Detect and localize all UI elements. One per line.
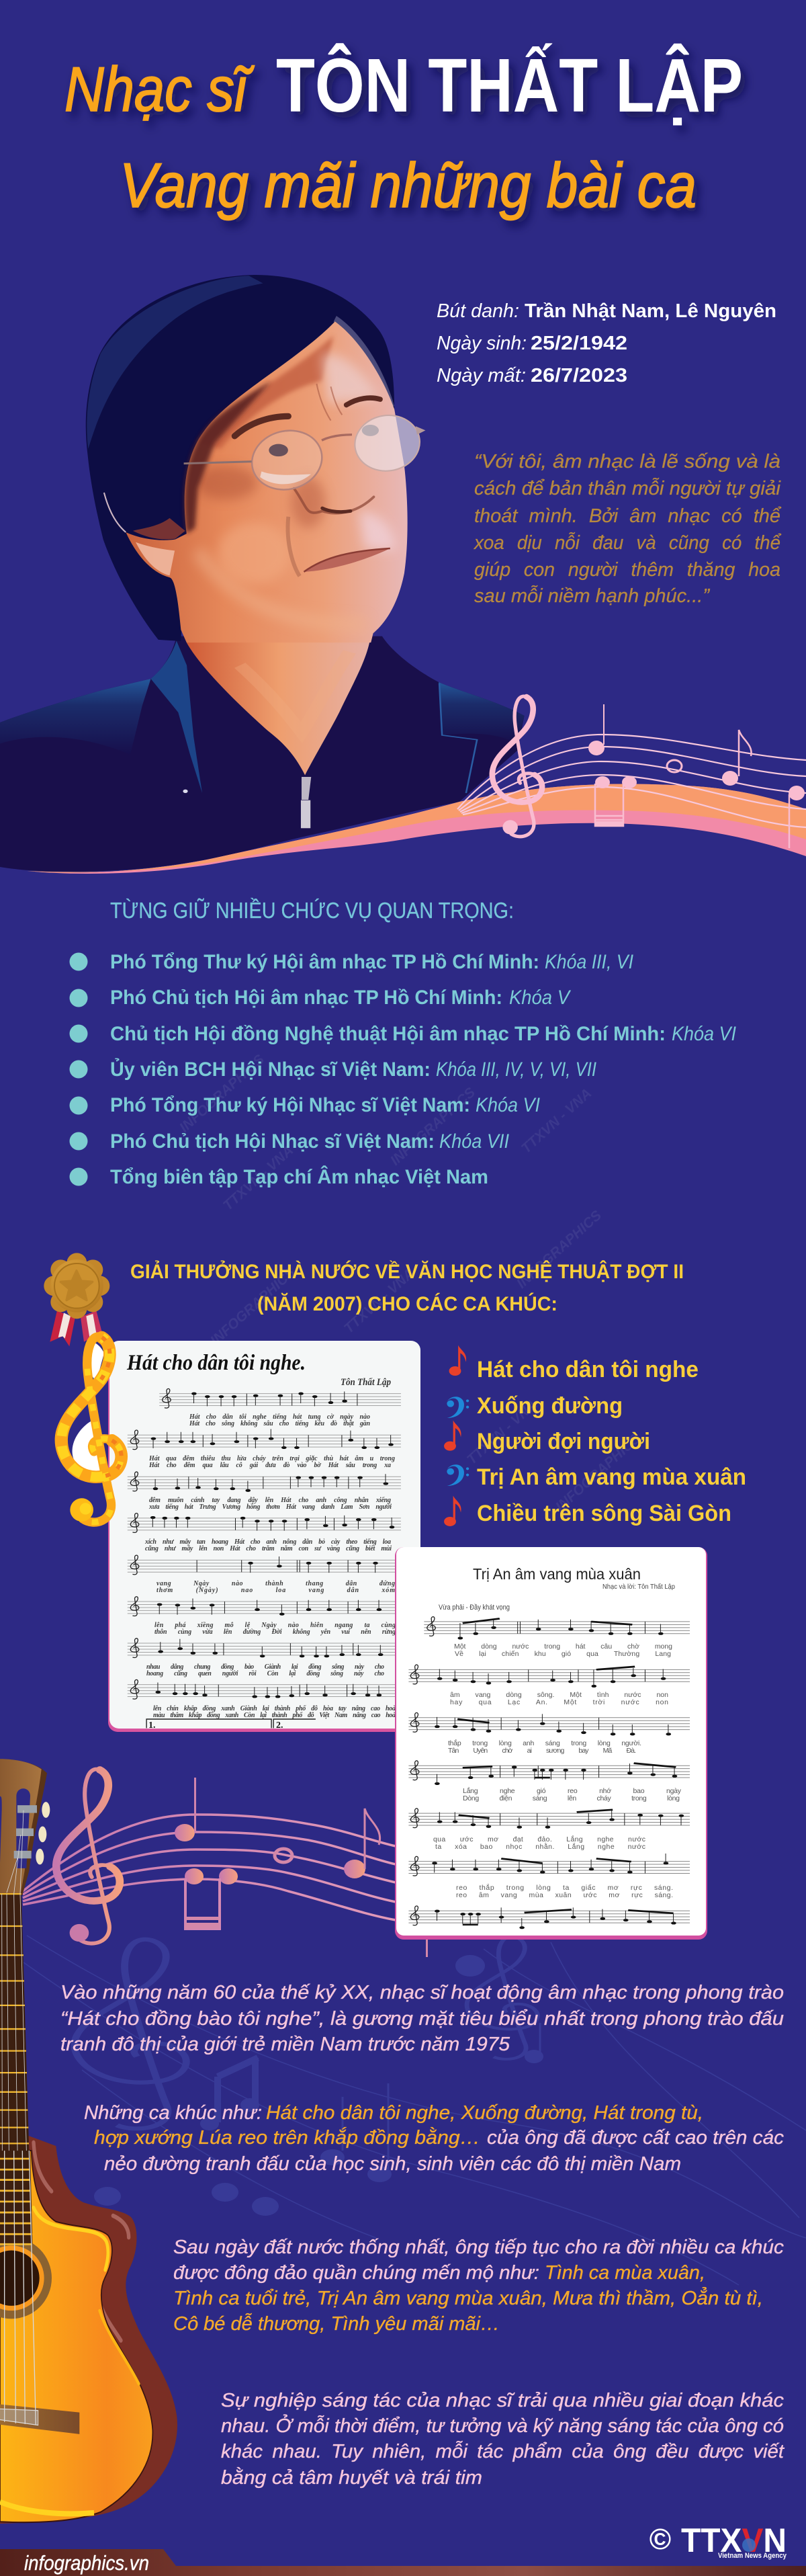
lyrics: qua ước mơ đạt đảo. Lắng nghe nước xyxy=(433,1835,645,1843)
lyrics: Hát cho đêm qua lâu cô gái đưa đò vào bờ Hát sâu trong xa xyxy=(148,1462,391,1469)
guitar neck and headstock xyxy=(0,1759,50,2151)
footer bar xyxy=(0,2549,806,2576)
list of positions: Ủy viên BCH Hội Nhạc sĩ Việt Nam: xyxy=(110,1058,431,1081)
lyrics: Dòng điện sáng lên cháy trong lòng xyxy=(463,1794,680,1802)
logo: TTXVN: © xyxy=(650,2523,671,2556)
lyrics: hoang cũng quen người rồi Còn lại đồng sông này cho xyxy=(146,1670,384,1677)
list of positions: Khóa V xyxy=(509,987,572,1009)
list of positions: Khóa VI xyxy=(476,1094,540,1116)
lyrics: xưa tiếng hát Trưng Vương hồng thơm Hát vang danh Lam Sơn người xyxy=(148,1503,392,1511)
music staff with gradient clef and notes xyxy=(23,1769,428,1957)
paragraph 2: Những ca khúc như: xyxy=(84,2102,262,2124)
panel: sheet music Trị An âm vang mùa xuân xyxy=(395,1547,707,1940)
lyrics: reo âm vang mùa xuân ước mơ rực sáng. xyxy=(456,1891,673,1899)
lyrics: Hát cho sông không sâu cho tiếng kêu đò thật gần xyxy=(189,1420,370,1427)
music staff with pink clef and notes xyxy=(457,696,806,848)
staves xyxy=(128,1388,401,1728)
paragraph 2: của ông đã được cất cao trên các xyxy=(487,2127,785,2149)
heading: state prize: GIẢI THƯỞNG NHÀ NƯỚC VỀ VĂN HỌC NGHỆ THUẬT ĐỢT II xyxy=(130,1260,684,1283)
paragraph 3 xyxy=(173,2237,785,2335)
lyrics: Tân Uyên chờ ai sương bay Mã Đà. xyxy=(448,1747,636,1755)
info: pen names and dates: 26/7/2023 xyxy=(531,365,627,386)
paragraph 1: tranh đô thị của giới trẻ miền Nam trước năm 1975 xyxy=(60,2034,510,2055)
list of awarded songs xyxy=(444,1345,746,1526)
quote: xoa dịu nỗi đau và cũng có thể xyxy=(473,532,782,554)
watermark: TTXVN - VNA xyxy=(341,1265,417,1337)
lyrics: đêm muôn cánh tay đang dậy lên Hát cho anh công nhân xiếng xyxy=(149,1497,391,1504)
paragraph 3: được đông đảo quần chúng mến mộ như: xyxy=(173,2262,539,2284)
decorative faint music background xyxy=(24,1936,806,2285)
list of positions: Khóa III, IV, V, VI, VII xyxy=(436,1058,596,1081)
quote xyxy=(473,451,782,607)
lyrics: Hát qua đêm thiêu thu lửa cháy trên trại giặc thù hát âm u trong xyxy=(148,1455,395,1462)
quote: sau mỗi niềm hạnh phúc...” xyxy=(474,585,710,607)
watermark: TTXVN - VNA xyxy=(464,1397,540,1468)
watermark xyxy=(177,1052,643,1515)
facial features xyxy=(234,416,288,436)
paragraph 1: Vào những năm 60 của thế kỷ XX, nhạc sĩ hoạt động âm nhạc trong phong trào xyxy=(60,1982,784,2003)
paragraph 3: Cô bé dễ thương, Tình yêu mãi mãi… xyxy=(173,2313,500,2335)
list of awarded songs: Người đợi người xyxy=(477,1429,650,1454)
watermark: TTXVN - VNA xyxy=(519,1085,594,1157)
logo: TTXVN: Vietnam News Agency xyxy=(718,2552,787,2560)
lyrics: Lắng nghe gió reo nhớ bao ngày xyxy=(463,1786,682,1795)
watermark: INFOGRAPHICS xyxy=(514,1208,604,1292)
lyrics xyxy=(144,1413,396,1719)
panel: sheet music Trị An âm vang mùa xuân: Nhạc và lời: Tôn Thất Lập xyxy=(602,1583,675,1591)
list of positions: Chủ tịch Hội đồng Nghệ thuật Hội âm nhạc TP Hồ Chí Minh: xyxy=(110,1023,666,1045)
list of awarded songs: Xuống đường xyxy=(477,1393,623,1419)
lyrics: Về lại chiến khu gió qua Thường Lang xyxy=(455,1650,671,1658)
paragraph 4 xyxy=(221,2390,785,2489)
paragraph 4: Sự nghiệp sáng tác của nhạc sĩ trải qua nhiều giai đoạn khác xyxy=(221,2390,785,2411)
lyrics: cũng như mây lên non Hát cho trăm năm con sư vàng cũng biết mùi xyxy=(145,1545,392,1552)
lyrics: thôn cùng vừa lên đường Đời không yên vui nên rừng xyxy=(154,1628,396,1636)
panel: sheet music Hát cho dân tôi nghe: 2. xyxy=(276,1720,283,1731)
heading: state prize: (NĂM 2007) CHO CÁC CA KHÚC: xyxy=(257,1292,557,1315)
info: pen names and dates: Ngày sinh: xyxy=(437,333,527,354)
quote: thoát mình. Bởi âm nhạc có thể xyxy=(474,505,782,527)
panel: sheet music Hát cho dân tôi nghe: Tôn Thất Lập xyxy=(341,1377,391,1388)
lyrics: nhau dâng chung đồng bào Giành lại đồng sông này cho xyxy=(146,1663,384,1671)
quote: cách để bản thân mỗi người tự giải xyxy=(474,477,782,499)
list of positions: Khóa VII xyxy=(439,1130,509,1153)
lyrics: xích như mây tan hoang Hát cho anh nông dân bỏ cày theo tiếng loa xyxy=(144,1538,391,1546)
hair edge line xyxy=(104,493,126,532)
heading: positions: TỪNG GIỮ NHIỀU CHỨC VỤ QUAN TRỌNG: xyxy=(110,898,514,923)
glasses xyxy=(269,444,288,456)
watermark: INFOGRAPHICS xyxy=(177,1052,267,1136)
panel: sheet music Hát cho dân tôi nghe xyxy=(108,1341,420,1732)
icon: medal xyxy=(44,1253,109,1346)
lyrics: Hát cho dân tôi nghe tiếng hát tung cờ ngày nào xyxy=(189,1413,370,1421)
watermark: INFOGRAPHICS xyxy=(553,1431,643,1515)
title xyxy=(64,43,743,220)
paragraph 3: Tình ca mùa xuân, xyxy=(545,2262,705,2284)
wave ribbon xyxy=(27,784,806,874)
lyrics: thắp trong lòng anh sáng trong lòng người. xyxy=(448,1739,641,1747)
icon: golden treble clef xyxy=(59,1337,122,1522)
logo: TTXVN: TTXVN xyxy=(681,2522,787,2559)
footer label: infographics.vn xyxy=(24,2551,149,2575)
lyrics: âm vang dòng sông. Một tình nước non xyxy=(450,1691,668,1699)
hair xyxy=(86,275,425,642)
list of positions: Phó Tổng Thư ký Hội Nhạc sĩ Việt Nam: xyxy=(110,1094,470,1116)
info: pen names and dates: Ngày mất: xyxy=(437,365,526,386)
paragraph 1 xyxy=(60,1982,784,2055)
paragraph 2: hợp xướng Lúa reo trên khắp đồng bằng… xyxy=(94,2126,480,2149)
lyrics: lên phá xiềng mô lệ Ngày nào hiên ngang ta cùng xyxy=(154,1622,396,1629)
info: pen names and dates: Bút danh: xyxy=(437,300,519,322)
paragraph 2: Hát cho dân tôi nghe, Xuống đường, Hát trong tù, xyxy=(266,2102,703,2124)
staves xyxy=(408,1617,690,1927)
list of positions: Phó Tổng Thư ký Hội âm nhạc TP Hồ Chí Minh: xyxy=(110,951,539,973)
paragraph 4: bằng cả tâm huyết và trái tim xyxy=(221,2466,482,2489)
watermark: INFOGRAPHICS xyxy=(388,1085,478,1169)
title: Nhạc sĩ xyxy=(64,54,255,124)
paragraph 4: khác nhau. Tuy nhiên, mỗi tác phẩm của ông đều được viết xyxy=(221,2440,785,2462)
title: Vang mãi những bài ca xyxy=(120,150,697,220)
info: pen names and dates: 25/2/1942 xyxy=(531,333,627,354)
heading: state prize xyxy=(130,1260,684,1315)
paragraph 1: “Hát cho đồng bào tôi nghe”, là gương mặt tiêu biểu nhất trong phong trào đấu xyxy=(60,2008,784,2030)
paragraph 4: nhau. Ở mỗi thời điểm, tư tưởng và kỹ năng sáng tác của ông có xyxy=(221,2413,784,2437)
panel: sheet music Trị An âm vang mùa xuân: Trị An âm vang mùa xuân xyxy=(473,1565,641,1583)
panel: sheet music Hát cho dân tôi nghe: 1. xyxy=(148,1720,156,1731)
paragraph 2 xyxy=(84,2102,785,2175)
paragraph 3: Sau ngày đất nước thống nhất, ông tiếp tục cho ra đời nhiều ca khúc xyxy=(173,2237,785,2258)
guitar body xyxy=(0,2136,177,2524)
list of positions xyxy=(70,951,736,1188)
list of positions: Phó Chủ tịch Hội âm nhạc TP Hồ Chí Minh: xyxy=(110,987,502,1009)
photo: portrait of the composer xyxy=(0,275,525,872)
watermark: INFOGRAPHICS xyxy=(208,1265,298,1349)
lyrics xyxy=(433,1643,682,1899)
info: pen names and dates xyxy=(437,300,776,386)
watermark: TTXVN - VNA xyxy=(220,1142,296,1214)
lyrics: hay qua Lạc An. Một trời nước non xyxy=(450,1698,668,1706)
icon: guitar xyxy=(0,1759,177,2524)
lyrics: vang Ngày nào thành thang dân đứng xyxy=(156,1580,395,1587)
quote: giúp con người thêm thăng hoa xyxy=(474,559,780,581)
list of positions: Phó Chủ tịch Hội Nhạc sĩ Việt Nam: xyxy=(110,1130,435,1153)
info: pen names and dates: Trần Nhật Nam, Lê Nguyên xyxy=(525,300,776,322)
panel: sheet music Hát cho dân tôi nghe: Hát cho dân tôi nghe. xyxy=(126,1351,306,1375)
list of positions: Tổng biên tập Tạp chí Âm nhạc Việt Nam xyxy=(110,1165,488,1188)
jacket xyxy=(0,636,525,872)
icons: song bullets xyxy=(444,1345,469,1526)
panel: sheet music Trị An âm vang mùa xuân: Vừa phải - Đầy khát vọng xyxy=(439,1604,510,1612)
list of awarded songs: Hát cho dân tôi nghe xyxy=(477,1357,699,1382)
lyrics: màu thắm khắp đồng xanh Còn lại thành phố đô Việt Nam nâng cao hoà xyxy=(153,1712,396,1719)
face xyxy=(126,321,408,642)
facial shading xyxy=(133,335,396,624)
quote: “Với tôi, âm nhạc là lẽ sống và là xyxy=(474,451,780,472)
list of awarded songs: Trị An âm vang mùa xuân xyxy=(477,1464,746,1490)
lyrics: thơm (Ngày) nao loa vang dân xóm xyxy=(156,1587,395,1594)
lyrics: reo thắp trong lòng ta giấc mơ rực sáng. xyxy=(456,1883,673,1892)
list of positions: Khóa VI xyxy=(672,1023,736,1045)
list of positions: Khóa III, VI xyxy=(545,951,633,973)
lyrics: Một dòng nước trong hát câu chờ mong xyxy=(454,1643,672,1651)
lyrics: ta xóa bao nhọc nhằn. Lắng nghe nước xyxy=(435,1842,645,1851)
list of awarded songs: Chiều trên sông Sài Gòn xyxy=(477,1501,731,1526)
paragraph 2: nẻo đường tranh đấu của học sinh, sinh viên các đô thị miền Nam xyxy=(104,2153,681,2175)
paragraph 3: Tình ca tuổi trẻ, Trị An âm vang mùa xuân, Mưa thì thầm, Oẳn tù tì, xyxy=(173,2286,763,2309)
lyrics: lên chín khắp đồng xanh Giành lại thành phố đô hòa tay nâng cao hoà xyxy=(153,1705,396,1712)
